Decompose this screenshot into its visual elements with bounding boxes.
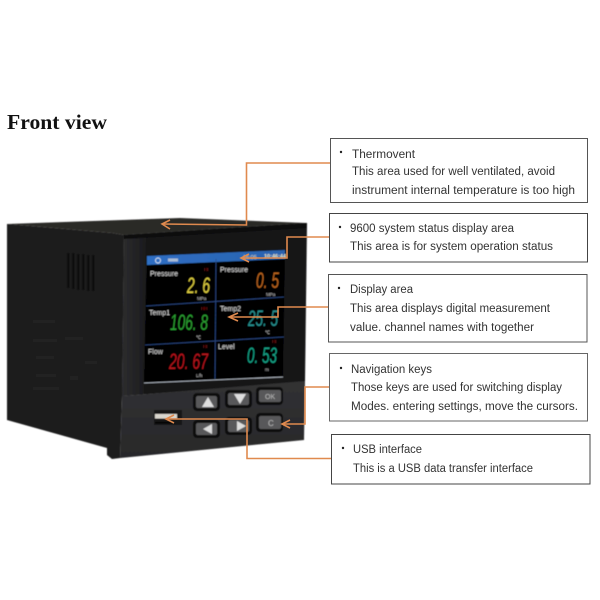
bezel left band: [122, 234, 146, 396]
channel: Pressure 0.5: [220, 267, 279, 297]
description: This area is for system operation status: [350, 241, 553, 253]
status bar content: 10:46:44: [264, 254, 287, 260]
key: right: [225, 417, 252, 435]
arrow: display area: [229, 307, 328, 321]
panel: USB interface: [332, 434, 590, 484]
alarm marks: [201, 267, 276, 349]
key: left: [193, 420, 220, 438]
bullet: [338, 287, 340, 289]
lower key panel: [120, 381, 305, 458]
arrow: navigation keys: [282, 387, 329, 428]
channel: Pressure 0.5: 0. 5: [256, 268, 279, 293]
alarm marks: HH: [201, 306, 208, 311]
channel: Temp2 25.5: [220, 306, 278, 335]
heading: Navigation keys: [351, 364, 432, 376]
channel: Level 0.53: 0. 53: [247, 343, 277, 368]
description: [352, 166, 575, 197]
navigation keys: [193, 387, 283, 438]
front bezel: [122, 223, 307, 396]
description: This area displays digital measurement: [350, 303, 551, 315]
arrow: USB interface: [166, 415, 331, 458]
channel: Pressure 0.5: Pressure: [220, 267, 248, 274]
channel: Flow 20.67: 20. 67: [168, 349, 208, 374]
channel: Level 0.53: m: [265, 367, 269, 372]
description: Those keys are used for switching display: [351, 382, 562, 394]
bullet: [340, 367, 342, 369]
panel: display area: [328, 274, 587, 342]
bullet: [342, 447, 344, 449]
instrument top bevel: [7, 218, 307, 235]
channel: Pressure 0.5: MPa: [266, 292, 276, 297]
channel: Pressure 2.6: Pressure: [150, 271, 178, 278]
arrow: system status: [241, 237, 329, 262]
instrument photo: [7, 218, 307, 459]
instrument side housing: [7, 224, 124, 459]
key: down: [225, 390, 252, 408]
heading: 9600 system status display area: [350, 223, 515, 235]
bullet: [340, 151, 342, 153]
key: OK: OK: [265, 394, 275, 401]
channel: Temp2 25.5: 25. 5: [247, 306, 278, 331]
channel: Temp1 106.8: Temp1: [149, 310, 170, 317]
channel: Temp1 106.8: ℃: [196, 335, 202, 340]
thermovent slots: [67, 253, 94, 291]
description: This is a USB data transfer interface: [353, 463, 533, 475]
description: This area used for well ventilated, avoid: [352, 166, 555, 178]
USB port: [154, 410, 182, 425]
key: C: C: [268, 419, 274, 428]
key: up: [193, 393, 220, 411]
channel: Pressure 2.6: 2. 6: [186, 273, 210, 298]
description: [351, 382, 578, 413]
heading: USB interface: [353, 444, 422, 456]
description: Modes. entering settings, move the cursors.: [351, 401, 578, 413]
panel: thermovent: [330, 138, 588, 202]
panel: navigation keys: [330, 354, 588, 421]
alarm marks: HI: [203, 344, 208, 349]
description: [350, 303, 551, 334]
alarm marks: HI: [204, 267, 208, 272]
heading: Thermovent: [352, 149, 416, 161]
status bar content: 16:05: [243, 255, 257, 261]
screen: [144, 250, 287, 383]
screen grid lines: [145, 259, 284, 379]
channel: Temp1 106.8: [149, 310, 208, 340]
bezel top shadow band: [124, 223, 307, 239]
channel: Temp2 25.5: Temp2: [220, 306, 241, 313]
channel: Temp2 25.5: ℃: [265, 330, 271, 335]
heading: Display area: [350, 284, 414, 296]
channel: Flow 20.67: [148, 349, 208, 378]
channel: Level 0.53: Level: [218, 344, 235, 351]
status bar content: [156, 254, 287, 263]
arrow: thermovent: [162, 163, 330, 229]
description: instrument internal temperature is too high: [352, 185, 575, 197]
title: Front view: [7, 110, 108, 134]
channel: Pressure 2.6: [150, 271, 210, 301]
status bar: [147, 250, 285, 265]
side label print: [33, 320, 97, 390]
channel: Temp1 106.8: 106. 8: [170, 310, 208, 335]
channel: Flow 20.67: L/h: [196, 373, 203, 378]
channel: Level 0.53: [218, 343, 277, 372]
panel: system status: [330, 214, 588, 262]
bullet: [339, 226, 341, 228]
channel: Flow 20.67: Flow: [148, 349, 164, 356]
channel: Pressure 2.6: MPa: [197, 296, 207, 301]
description: value. channel names with together: [350, 322, 534, 334]
alarm marks: HI: [272, 339, 276, 344]
